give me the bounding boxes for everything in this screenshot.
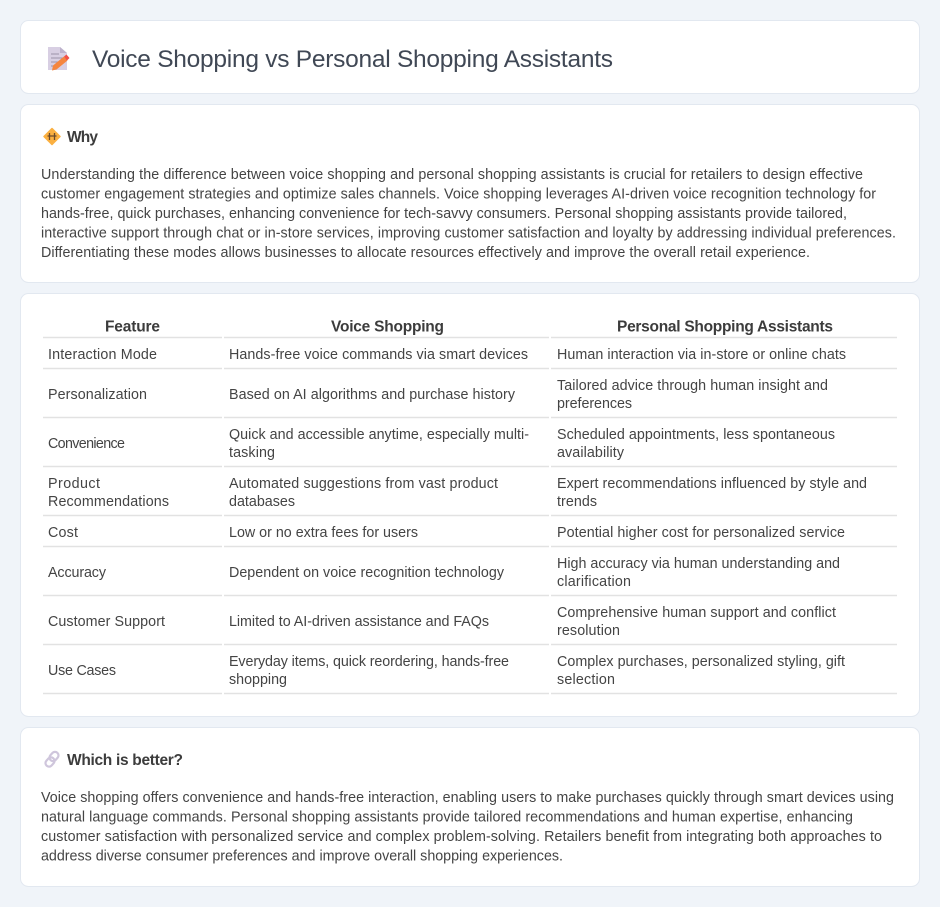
row: product recommendations: Product [48,476,100,492]
row: interaction mode [48,347,846,363]
row: convenience: Convenience [48,436,125,452]
table header: Voice Shopping [331,318,444,336]
panel: why [20,104,920,282]
table header [105,318,833,336]
row: customer support: Comprehensive human support and conflict [557,605,836,621]
row: interaction mode: Hands-free voice commands via smart devices [229,347,528,363]
icon: warning diamond [44,128,60,144]
row: product recommendations: Recommendations [48,494,169,510]
row: accuracy: Dependent on voice recognition technology [229,565,505,581]
row: customer support: Customer Support [48,614,165,630]
text block: which is better: natural language commands. Personal shopping assistants provide tailored recommendations and human expertise, enhancing [41,810,853,826]
row: product recommendations: trends [557,494,597,510]
row: convenience: tasking [229,445,275,461]
row: cost: Low or no extra fees for users [229,525,418,541]
text block: why: interactive support through chat or in-store services, improving customer satisfaction and loyalty by addressing individual preferences. [41,226,896,242]
text block: why: Understanding the difference between voice shopping and personal shopping assistants is crucial for retailers to design effective [41,167,863,183]
text block: which is better [41,790,894,864]
heading: why: Why [67,129,98,146]
row: personalization [48,378,828,412]
row: convenience [48,427,835,461]
text block: why: hands-free, quick purchases, enhancing convenience for tech-savvy consumers. Personal shopping assistants provide tailored, [41,206,847,222]
row: cost [48,525,845,541]
text block: why [41,167,896,261]
row: use cases: Everyday items, quick reordering, hands-free [229,654,509,670]
row: convenience: availability [557,445,625,461]
text block: which is better: Voice shopping offers convenience and hands-free interaction, enabling users to make purchases quickly through smart devices using [41,790,894,806]
row: personalization: Tailored advice through human insight and [557,378,828,394]
panel: comparison table [20,294,920,716]
row: use cases: Complex purchases, personalized styling, gift [557,654,845,670]
table header: Feature [105,318,160,336]
text block: why: Differentiating these modes allows businesses to allocate resources effectively and improve the overall retail experience. [41,245,810,261]
row: personalization: Personalization [48,387,147,403]
row: accuracy [48,556,840,590]
row: product recommendations: Expert recommendations influenced by style and [557,476,867,492]
row: interaction mode: Human interaction via in-store or online chats [557,347,846,363]
table header: Personal Shopping Assistants [617,318,833,336]
row: interaction mode: Interaction Mode [48,347,157,363]
heading: which is better: Which is better? [67,752,183,769]
row: use cases [48,654,845,688]
row: personalization: Based on AI algorithms and purchase history [229,387,516,403]
row: convenience: Quick and accessible anytime, especially multi- [229,427,529,443]
row: accuracy: Accuracy [48,565,107,581]
row: product recommendations: databases [229,494,295,510]
row: product recommendations [48,476,867,510]
row: use cases: Use Cases [48,663,116,679]
row: personalization: preferences [557,396,632,412]
row: cost: Cost [48,525,78,541]
row: use cases: shopping [229,672,287,688]
row: accuracy: High accuracy via human understanding and [557,556,840,572]
row: use cases: selection [557,672,615,688]
row: customer support: resolution [557,623,620,639]
row: customer support [48,605,836,639]
text block: which is better: customer satisfaction with personalized service and complex problem-solving. Retailers benefit from integrating both approaches to [41,829,882,845]
title: Voice Shopping vs Personal Shopping Assistants [92,46,613,73]
text block: why: customer engagement strategies and optimize sales channels. Voice shopping leverages AI-driven voice recognition technology for [41,186,876,202]
panel: which is better [20,728,920,886]
row: accuracy: clarification [557,574,631,590]
row: customer support: Limited to AI-driven assistance and FAQs [229,614,489,630]
row: cost: Potential higher cost for personalized service [557,525,845,541]
icon: link [44,750,60,768]
icon: memo with pencil [48,47,70,70]
text block: which is better: address diverse consumer preferences and improve overall shopping experiences. [41,848,563,864]
row: product recommendations: Automated suggestions from vast product [229,476,498,492]
row: convenience: Scheduled appointments, less spontaneous [557,427,835,443]
panel: title card [20,20,920,94]
